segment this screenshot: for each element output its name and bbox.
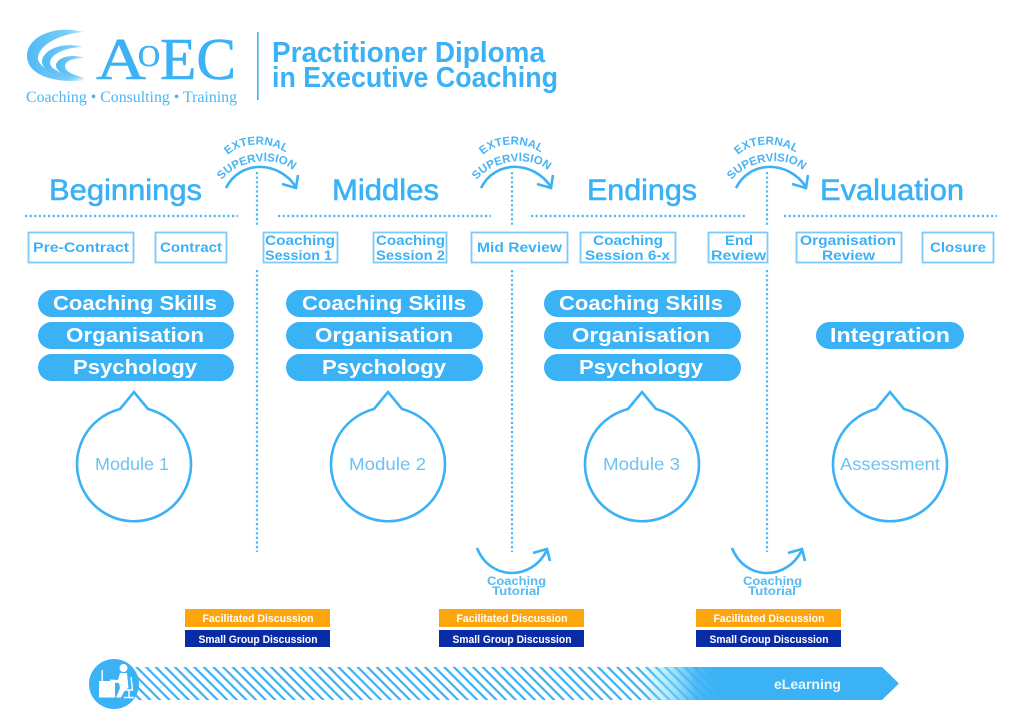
speech circle: Assessment — [833, 392, 947, 521]
speech circle: Module 1: Module 1 — [95, 454, 169, 474]
external supervision arrow 3 — [727, 136, 810, 190]
module 3 topics — [544, 290, 741, 381]
stage box: Organisation Review: Review — [822, 248, 876, 263]
module 3 topics: Coaching Skills — [559, 293, 723, 315]
phase heading: Evaluation: Evaluation — [820, 174, 964, 207]
evaluation topic: Integration — [816, 322, 964, 349]
stage box: Coaching Session 2: Coaching — [376, 233, 445, 248]
external supervision arrow 3: EXTERNAL — [734, 136, 796, 154]
coaching tutorial arrow 1: Tutorial — [492, 584, 540, 598]
module 3 topics: Psychology — [579, 357, 704, 379]
coaching tutorial arrow 2 — [732, 548, 805, 598]
module 1 topics: Psychology — [73, 357, 198, 379]
module 2 topics: Organisation — [315, 325, 453, 347]
speech circle: Module 3 — [585, 392, 699, 521]
module 1 topics — [38, 290, 234, 381]
logo: AoEC: EC — [160, 26, 236, 92]
stage box: Coaching Session 1 — [264, 232, 338, 263]
stage box: Organisation Review: Organisation — [800, 233, 896, 248]
coaching tutorial arrow 1: Coaching — [487, 574, 546, 588]
discussion bars 1 — [185, 609, 330, 647]
stage box: Organisation Review — [796, 232, 902, 263]
speech circle: Module 2 — [331, 392, 445, 521]
discussion bars 3 — [696, 609, 841, 647]
external supervision arrow 3: SUPERVISION — [727, 152, 807, 179]
logo wordmark: A — [96, 26, 146, 92]
title — [272, 37, 558, 94]
phase heading: Middles: Middles — [332, 174, 439, 207]
external supervision arrow 2: SUPERVISION — [472, 152, 552, 179]
module 2 topics — [286, 290, 483, 381]
logo: AoEC — [26, 26, 237, 106]
coaching tutorial arrow 1 — [477, 548, 550, 598]
discussion bars 3: Small Group Discussion — [710, 634, 829, 646]
speech circle: Module 1 — [77, 392, 191, 521]
coaching tutorial arrow 2: Coaching — [743, 574, 802, 588]
stage box: Coaching Session 1: Coaching — [265, 233, 335, 248]
phase heading: Endings: Endings — [587, 174, 697, 207]
discussion bars 3: Facilitated Discussion — [714, 613, 825, 625]
stage box: Coaching Session 6-x: Session 6-x — [585, 248, 671, 263]
coaching tutorial arrow 2: Tutorial — [748, 584, 796, 598]
title: in Executive Coaching — [272, 62, 558, 94]
discussion bars 1: Facilitated Discussion — [202, 613, 314, 625]
stage box: Pre-Contract — [28, 232, 134, 262]
external supervision arrow 1 — [217, 136, 300, 190]
stage box: Contract: Contract — [160, 240, 223, 255]
header divider — [257, 32, 259, 100]
speech circle: Module 3: Module 3 — [603, 454, 680, 474]
stage box: End Review: Review — [711, 248, 767, 263]
stage box: Closure: Closure — [930, 240, 987, 255]
module 2 topics: Psychology — [322, 357, 447, 379]
logo strapline: Coaching • Consulting • Training — [26, 89, 237, 106]
discussion bars 1: Small Group Discussion — [198, 634, 318, 646]
module 1 topics: Organisation — [66, 325, 204, 347]
module 3 topics: Organisation — [572, 325, 710, 347]
stage box: Coaching Session 2 — [374, 232, 446, 263]
stage box: Closure — [922, 232, 994, 262]
icon: person at desk — [89, 659, 139, 709]
stage box: End Review — [708, 232, 768, 263]
stage box: Coaching Session 6-x: Coaching — [593, 233, 663, 248]
logo swirl — [27, 30, 85, 81]
external supervision arrow 2 — [472, 136, 554, 190]
evaluation topic: Integration: Integration — [830, 325, 950, 347]
eLearning arrow bar: eLearning — [774, 676, 841, 692]
discussion bars 2 — [439, 609, 584, 647]
eLearning arrow bar — [132, 667, 899, 700]
stage box: Contract — [156, 232, 226, 262]
external supervision arrow 2: EXTERNAL — [478, 136, 542, 154]
speech circle: Module 2: Module 2 — [349, 454, 426, 474]
discussion bars 2: Facilitated Discussion — [456, 613, 568, 625]
stage box: Pre-Contract: Pre-Contract — [33, 240, 130, 255]
module 1 topics: Coaching Skills — [53, 293, 217, 315]
discussion bars 2: Small Group Discussion — [452, 634, 572, 646]
title: Practitioner Diploma — [272, 37, 546, 69]
speech circle: Assessment: Assessment — [840, 454, 940, 474]
stage box: End Review: End — [725, 233, 753, 248]
external supervision arrow 1: EXTERNAL — [224, 136, 286, 154]
stage box: Coaching Session 1: Session 1 — [265, 248, 333, 263]
stage box: Mid Review: Mid Review — [477, 240, 563, 255]
logo: AoEC: O — [138, 38, 160, 73]
stage box: Coaching Session 6-x — [580, 232, 676, 263]
phase heading: Beginnings: Beginnings — [49, 174, 202, 207]
stage box: Mid Review — [472, 232, 568, 262]
stage box: Coaching Session 2: Session 2 — [376, 248, 445, 263]
external supervision arrow 1: SUPERVISION — [217, 152, 297, 179]
module 2 topics: Coaching Skills — [302, 293, 466, 315]
